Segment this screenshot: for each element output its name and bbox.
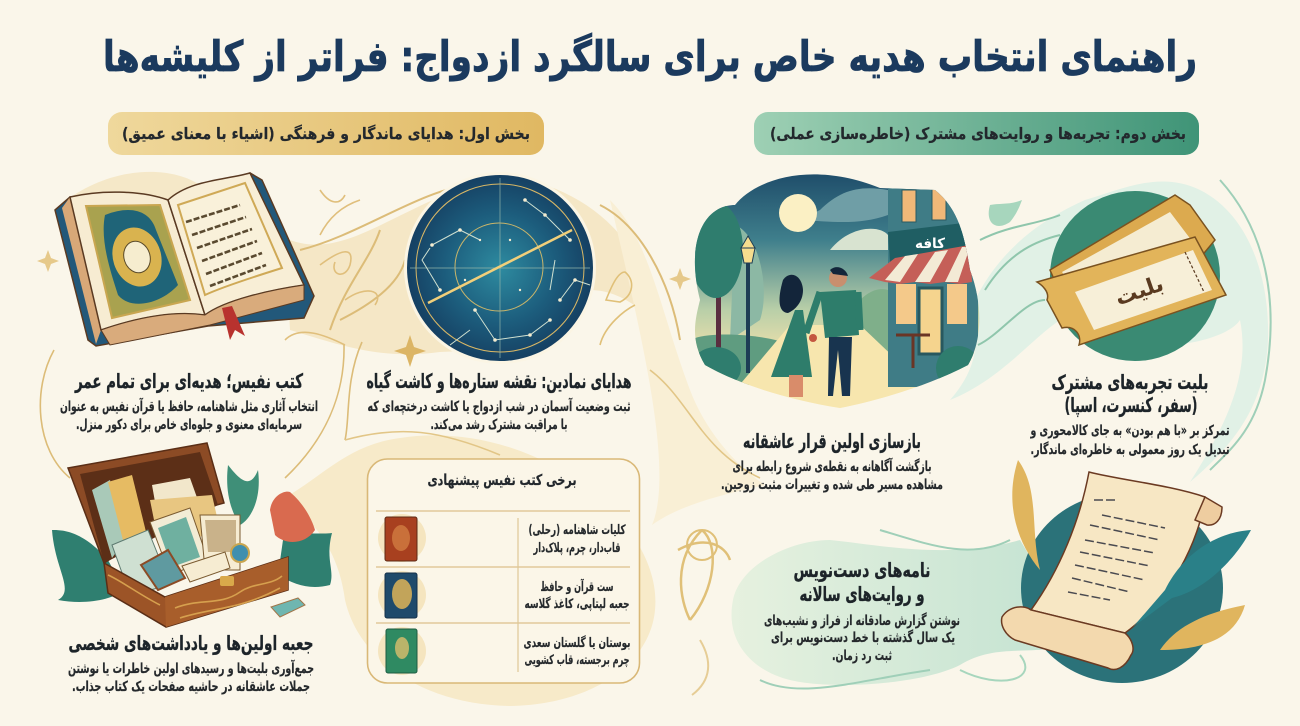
row 2: ست قرآن و حافظ <box>540 578 614 595</box>
row 3: بوستان یا گلستان سعدی <box>524 635 630 651</box>
man <box>806 267 860 396</box>
bushes <box>699 347 741 380</box>
text block: fine books: کتب نفیس؛ هدیه‌ای برای تمام عمر <box>74 369 303 393</box>
row 2: جعبه لپتاپی، کاغذ گلاسه <box>524 596 630 612</box>
text block: memory box: جمع‌آوری بلیت‌ها و رسیدهای اولین خاطرات یا نوشتن <box>68 659 314 677</box>
cafe building <box>888 187 978 387</box>
icon: tickets <box>1037 191 1226 361</box>
illustration: couple at cafe <box>694 174 980 408</box>
section pill: part one: بخش اول: هدایای ماندگار و فرهنگی (اشیاء با معنای عمیق) <box>122 124 530 143</box>
icon: memory chest <box>52 443 332 627</box>
text block: first date <box>721 429 943 493</box>
woman <box>771 275 812 397</box>
illustration: scroll and quill <box>1002 460 1251 683</box>
row 1: کلیات شاهنامه (رحلی) <box>528 523 626 538</box>
section pill: part two: بخش دوم: تجربه‌ها و روایت‌های مشترک (خاطره‌سازی عملی) <box>770 124 1186 143</box>
text block: first date: مشاهده مسیر طی شده و تغییرات مثبت زوجین. <box>721 477 943 493</box>
text block: memory box: جملات عاشقانه در حاشیه صفحات یک کتاب جذاب. <box>72 679 310 695</box>
text block: handwritten letters: ثبت رد زمان. <box>832 648 892 664</box>
lamp post <box>746 260 750 373</box>
text block: shared experience tickets <box>1030 370 1230 458</box>
text block: symbolic gifts <box>366 369 632 433</box>
icon: star chart <box>404 172 596 364</box>
text block: memory box: جعبه اولین‌ها و یادداشت‌های شخصی <box>68 631 314 655</box>
row 1 <box>378 514 626 562</box>
panel: recommended books table <box>368 459 640 683</box>
icon: open book <box>55 173 314 346</box>
text block: handwritten letters: نوشتن گزارش صادقانه از فراز و نشیب‌های <box>764 612 960 629</box>
text block: handwritten letters: نامه‌های دست‌نویس <box>794 558 930 582</box>
text block: first date: بازگشت آگاهانه به نقطه‌ی شروع رابطه برای <box>732 457 932 475</box>
row 1: قاب‌دار، چرم، پلاک‌دار <box>533 541 620 556</box>
row 2 <box>378 571 630 619</box>
text block: handwritten letters: و روایت‌های سالانه <box>800 582 924 606</box>
text block: fine books <box>60 369 318 433</box>
text block: symbolic gifts: با مراقبت مشترک رشد می‌کند. <box>430 417 568 433</box>
section pill: part two <box>754 112 1199 155</box>
text block: fine books: انتخاب آثاری مثل شاهنامه، حافظ یا قرآن نفیس به عنوان <box>60 397 318 415</box>
gold decorative ribbons <box>37 172 765 706</box>
illustration: couple at cafe: کافه <box>915 236 946 252</box>
icon: tickets: بلیت <box>1112 272 1167 311</box>
section pill: part one <box>108 112 544 155</box>
text block: shared experience tickets: (سفر، کنسرت، اسپا) <box>1064 393 1198 418</box>
text block: symbolic gifts: هدایای نمادین: نقشه ستاره‌ها و کاشت گیاه <box>366 369 632 393</box>
road <box>742 325 922 408</box>
text block: memory box <box>68 631 314 695</box>
table heading: برخی کتب نفیس پیشنهادی <box>428 471 576 490</box>
text block: handwritten letters <box>764 558 960 664</box>
row 3 <box>378 627 630 675</box>
text block: shared experience tickets: بلیت تجربه‌های مشترک <box>1052 370 1208 394</box>
text block: handwritten letters: یک سال گذشته با خط دست‌نویس برای <box>771 629 955 646</box>
text block: symbolic gifts: ثبت وضعیت آسمان در شب ازدواج یا کاشت درختچه‌ای که <box>368 397 630 415</box>
mint decorative ribbons <box>732 180 1271 689</box>
text block: fine books: سرمایه‌ای معنوی و جلوه‌ای خاص برای دکور منزل. <box>76 417 302 433</box>
moon <box>779 194 817 232</box>
tree <box>716 297 721 348</box>
row 3: چرم برجسته، قاب کشویی <box>524 653 630 668</box>
text block: first date: بازسازی اولین قرار عاشقانه <box>743 429 921 453</box>
